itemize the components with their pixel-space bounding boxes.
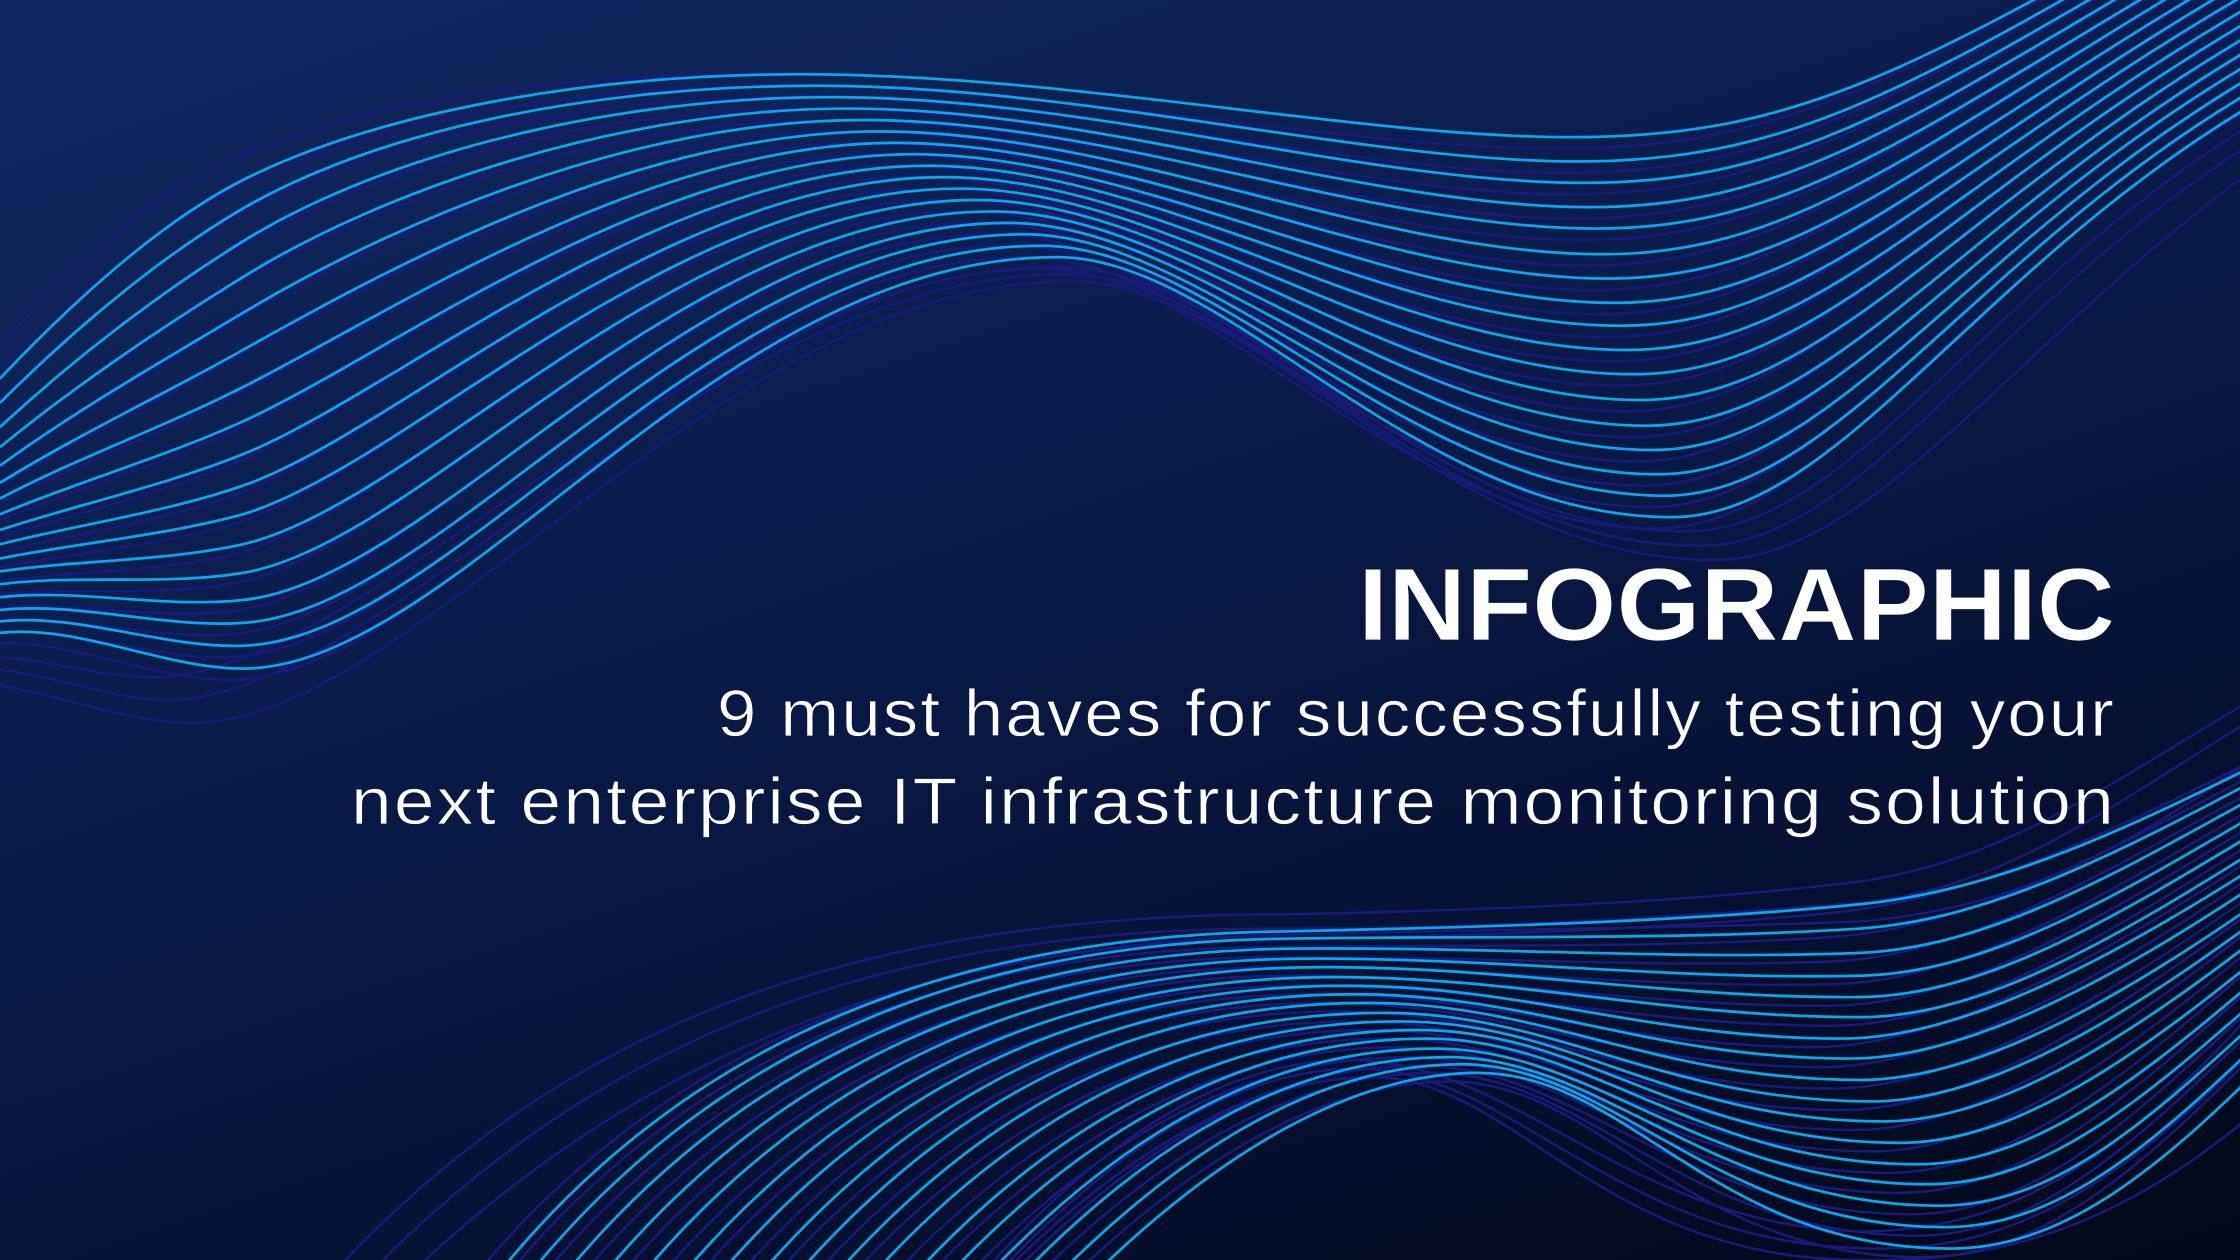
title: INFOGRAPHIC [1358, 547, 2115, 662]
bottom wave: bright lines [489, 750, 2240, 1260]
top wave: bright lines [0, 0, 2240, 669]
top wave of flowing lines [0, 0, 2240, 723]
bottom wave: dark interleaved lines [321, 664, 2240, 1260]
subtitle line 1: 9 must haves for successfully testing your [717, 676, 2116, 750]
top wave: dark interleaved lines [0, 0, 2240, 723]
bottom wave of flowing lines [321, 664, 2240, 1260]
subtitle line 2: next enterprise IT infrastructure monitoring solution [351, 764, 2116, 838]
subtitle block [351, 676, 2116, 838]
